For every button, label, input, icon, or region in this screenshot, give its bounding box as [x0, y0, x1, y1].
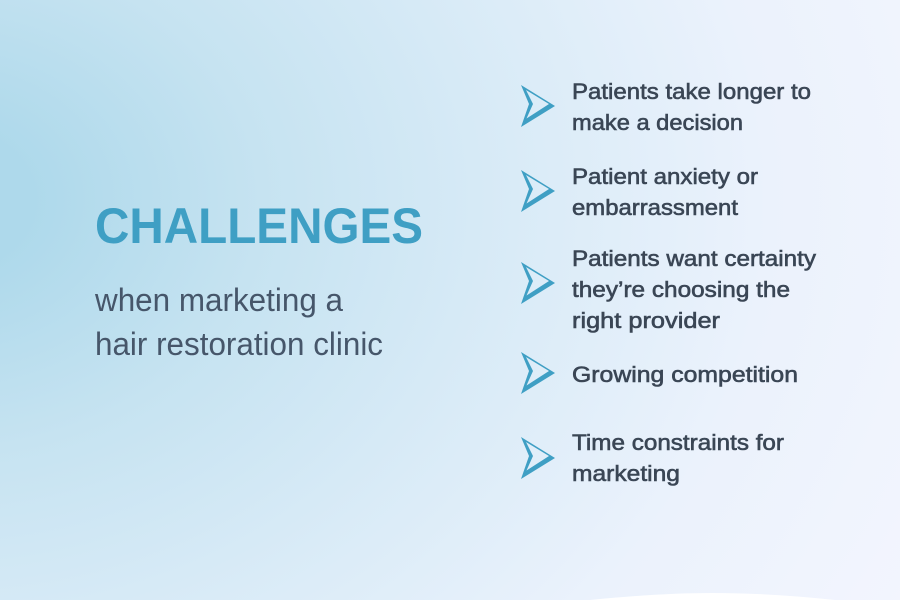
item 3: certainty [521, 246, 817, 333]
subtitle [94, 282, 383, 362]
icon: arrow 2 [521, 170, 555, 212]
text: item 3: they’re choosing the [572, 277, 790, 302]
icon: arrow 3 [521, 262, 555, 304]
text: item 4: Growing competition [572, 362, 798, 387]
text: item 2: embarrassment [572, 195, 739, 220]
text: item 2: Patient anxiety or [572, 164, 759, 189]
text: item 3 [572, 246, 817, 333]
title: CHALLENGES [95, 198, 423, 254]
subtitle: hair restoration clinic [95, 326, 383, 362]
white glow at bottom edge [590, 593, 835, 600]
item 2: anxiety [521, 164, 759, 220]
text: item 3: Patients want certainty [572, 246, 817, 271]
text: item 3: right provider [572, 308, 721, 333]
text: item 1: Patients take longer to [572, 79, 811, 104]
text: item 1: make a decision [572, 110, 743, 135]
text: item 5 [572, 430, 785, 486]
text: item 1 [572, 79, 811, 135]
text: item 5: marketing [572, 461, 680, 486]
subtitle: when marketing a [94, 282, 343, 318]
text: item 2 [572, 164, 759, 220]
item 4: competition [521, 352, 798, 394]
item 1: longer decisions [521, 79, 811, 135]
icon: arrow 1 [521, 85, 555, 127]
item 5: time constraints [521, 430, 785, 486]
icon: arrow 5 [521, 437, 555, 479]
text: item 5: Time constraints for [572, 430, 785, 455]
icon: arrow 4 [521, 352, 555, 394]
